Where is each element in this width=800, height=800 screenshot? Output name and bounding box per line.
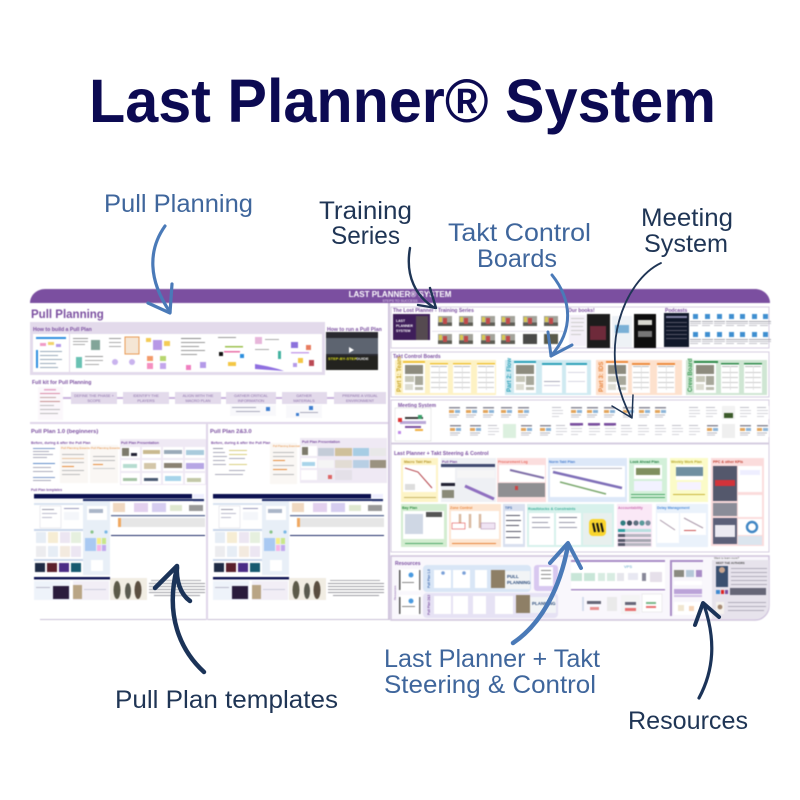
- label: Training Series: [319, 197, 412, 250]
- flow diagram: [571, 560, 665, 614]
- pull plan templates heading: Pull Plan templates: [31, 488, 62, 492]
- label: Last Planner + Takt Steering & Control: [384, 645, 600, 699]
- pull plan 1.0 resources: [423, 565, 531, 592]
- panel: takt control boards: [391, 352, 769, 397]
- panel: training series, book, podcasts: Our books!: [568, 308, 595, 314]
- panel: takt control boards: Takt Control Boards: [393, 354, 441, 360]
- full kit: MATERIALS: [293, 399, 315, 403]
- tips: [503, 504, 525, 547]
- lean sheet: [534, 565, 558, 591]
- about the authors: Want to learn more?: [714, 556, 740, 560]
- board part 2 flow: [505, 358, 591, 395]
- full kit: MACRO PLAN: [185, 399, 211, 403]
- panel: pull plan 2&3.0: Before, during & after the Pull Plan: [211, 441, 271, 445]
- full kit: PLAYERS: [137, 399, 155, 403]
- label: Training Series: Series: [331, 222, 400, 250]
- panel: last planner + takt steering and control: Last Planner + Takt Steering & Control: [394, 451, 489, 457]
- label: Takt Control Boards: Takt Control: [448, 219, 591, 247]
- full kit: IDENTIFY THE: [133, 394, 159, 398]
- pull plan 2&3 resources: Pull Plan 2&3: [427, 595, 431, 615]
- sidebar resource sheet: [670, 560, 703, 616]
- panel: training series, book, podcasts: Podcasts: [665, 308, 687, 314]
- label: Takt Control Boards: Boards: [477, 245, 557, 273]
- heading: Pull Planning: Pull Planning: [31, 309, 104, 321]
- weekly work plan: Weekly Work Plan: [671, 460, 702, 464]
- flow diagram: VPS: [624, 564, 632, 569]
- accountability: Accountability: [618, 506, 643, 510]
- panel: training series, book, podcasts: LAST: [396, 319, 406, 323]
- label: Pull Plan templates: Pull Plan templates: [115, 686, 338, 714]
- panel: meeting system: [391, 400, 769, 443]
- board part 1 team: Part 1: Team: [397, 356, 403, 392]
- label: Takt Control Boards: [448, 219, 591, 273]
- zone control: [449, 504, 501, 547]
- look ahead plan: Look Ahead Plan: [630, 460, 659, 464]
- panel: pull plan 1.0: Before, during & after the Pull Plan: [31, 441, 91, 445]
- board header: STEPS TO SUCCESS: [382, 299, 418, 303]
- arrow: training series: [409, 248, 436, 308]
- full kit: [32, 380, 386, 420]
- delay management: Delay Management: [657, 506, 690, 510]
- arrow: resources: [695, 603, 719, 698]
- pull plan 1.0 resources: PULL: [507, 574, 519, 579]
- board: Last Planner System overview: [30, 289, 771, 620]
- macro takt plan: [401, 458, 438, 502]
- tips: TIPS: [505, 506, 512, 510]
- panel: training series, book, podcasts: PLANNER: [396, 324, 413, 328]
- how to build band: [30, 322, 325, 375]
- full kit: ALIGN WITH THE: [183, 394, 214, 398]
- full kit: PREPARE A VISUAL: [342, 394, 378, 398]
- label: Pull Planning: Pull Planning: [104, 190, 253, 218]
- pull plan 2&3 resources: [423, 593, 558, 618]
- panel: pull plan 2&3.0: [210, 429, 387, 484]
- full kit: Full kit for Pull Planning: [32, 380, 91, 386]
- panel: pull plan 2&3.0: Pull Planning Essentials: [273, 444, 301, 448]
- full kit: SCOPE: [87, 399, 101, 403]
- how to run a pull plan: [326, 327, 382, 370]
- zone control: Zone Control: [450, 506, 472, 510]
- label: Last Planner + Takt Steering & Control: Last Planner + Takt: [384, 645, 600, 673]
- panel: meeting system: Meeting System: [398, 403, 437, 409]
- bay plan: Bay Plan: [402, 506, 417, 510]
- board part 1 team: [395, 356, 496, 395]
- label: Meeting System: Meeting: [641, 204, 733, 232]
- full kit: ENVIRONMENT: [346, 399, 375, 403]
- how to run a pull plan: STEP-BY-STEP: [328, 356, 357, 361]
- label: Meeting System: [641, 204, 733, 258]
- pull plan 1.0 resources: PLANNING: [507, 580, 531, 585]
- label: Training Series: Training: [319, 197, 412, 225]
- roadblocks and constraints: [527, 504, 614, 547]
- board part 3 ids: [596, 360, 682, 395]
- icon: miro logo: [589, 519, 606, 536]
- crew board: [686, 358, 767, 395]
- board header: [30, 289, 770, 303]
- arrow: pull planning: [148, 226, 172, 313]
- panel: pull plan 1.0: Pull Planning Essentials: [61, 446, 94, 450]
- board part 3 ids: Part 3: IDS: [599, 362, 605, 392]
- panel: resources: Resources: [393, 585, 397, 600]
- panel: last planner + takt steering and control: [391, 444, 769, 552]
- weekly work plan: [670, 458, 708, 502]
- pull plan: [441, 458, 496, 502]
- how to run a pull plan: GUIDE: [356, 356, 369, 361]
- arrow: meeting system: [612, 263, 661, 418]
- board header: LAST PLANNER® SYSTEM: [349, 290, 452, 299]
- template 1: [34, 494, 205, 600]
- how to run a pull plan: How to run a Pull Plan: [327, 327, 382, 333]
- ppc and other kpis: [711, 458, 764, 546]
- full kit: GATHER: [296, 394, 312, 398]
- procurement log: [497, 458, 546, 502]
- ppc and other kpis: PPC & other KPIs: [713, 460, 743, 464]
- panel: pull planning: [30, 303, 390, 620]
- bay plan: [401, 504, 447, 547]
- panel: training series, book, podcasts: SYSTEM: [396, 329, 410, 333]
- full kit: DEFINE THE PHASE +: [74, 394, 115, 398]
- panel: pull plan 1.0: Pull Plan Presentation: [121, 441, 159, 445]
- how to build band: How to build a Pull Plan: [33, 327, 92, 333]
- board part 2 flow: Part 2: Flow: [507, 358, 513, 392]
- about the authors: [712, 556, 769, 619]
- pull plan: Pull Plan: [442, 460, 457, 464]
- panel: training series, book, podcasts: [391, 307, 771, 348]
- arrow: last planner + takt: [513, 543, 581, 643]
- full kit: GATHER CRITICAL: [234, 394, 268, 398]
- delay management: [656, 504, 708, 547]
- norm takt plan: [548, 458, 627, 502]
- macro takt plan: Macro Takt Plan: [404, 460, 431, 464]
- panel: pull plan 2&3.0: Pull Plan Presentation: [302, 440, 340, 444]
- pull plan 1.0 resources: Pull Plan 1.0: [427, 569, 431, 588]
- norm takt plan: Norm Takt Plan: [549, 460, 575, 464]
- panel: resources: Resources: [395, 561, 421, 567]
- panel: training series, book, podcasts: The Lost Planner - Training Series: [393, 308, 474, 314]
- label: Resources: Resources: [628, 707, 748, 735]
- accountability: [617, 504, 652, 547]
- look ahead plan: [629, 458, 667, 502]
- title: Last Planner® System: [89, 67, 716, 135]
- panel: pull plan 2&3.0: Pull Plan 2&3.0: [210, 429, 252, 435]
- roadblocks and constraints: Roadblocks & Constraints: [528, 507, 575, 511]
- panel: resources: [391, 556, 769, 620]
- panel: pull plan 1.0: Pull Plan 1.0 (beginners): [31, 429, 98, 435]
- label: Last Planner + Takt Steering & Control: Steering & Control: [384, 671, 596, 699]
- arrow: takt control boards: [548, 275, 572, 356]
- about the authors: MEET THE AUTHORS: [716, 561, 745, 565]
- pull plan 2&3 resources: PLANNING: [532, 601, 556, 606]
- panel: pull plan 1.0: Pull Planning Essentials: [91, 446, 124, 450]
- panel: pull plan 1.0: [31, 429, 206, 485]
- procurement log: Procurement Log: [498, 460, 528, 464]
- arrow: pull plan templates: [155, 566, 204, 672]
- full kit: INFORMATION: [238, 399, 264, 403]
- crew board: Crew Board: [688, 358, 694, 392]
- label: Meeting System: System: [644, 230, 728, 258]
- template 2: [213, 494, 384, 600]
